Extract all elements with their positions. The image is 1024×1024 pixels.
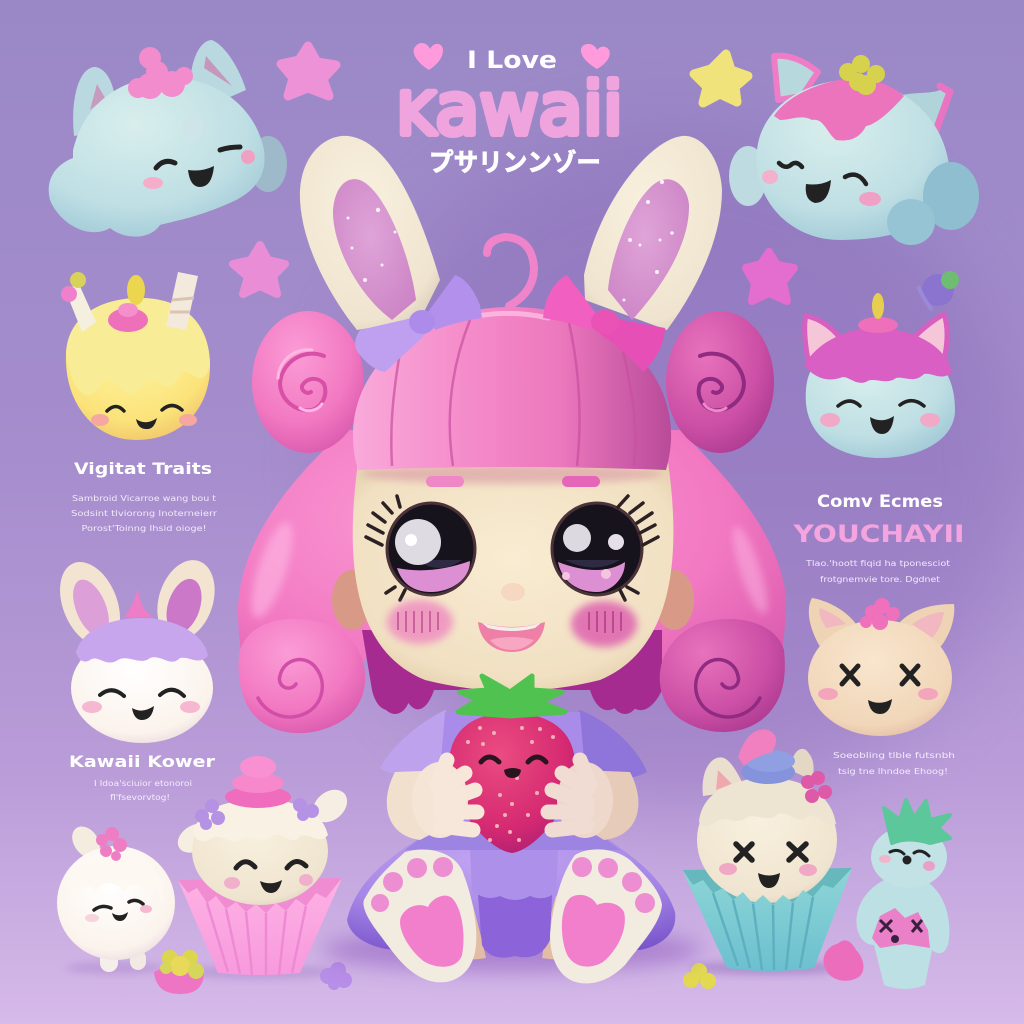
eye: left bbox=[366, 496, 475, 600]
shadow under character bbox=[322, 928, 702, 972]
mascot: peach cat bbox=[808, 598, 954, 736]
icon: yellow star top right bbox=[694, 54, 748, 103]
face bbox=[353, 462, 673, 691]
mascot: right blue cat bbox=[804, 271, 959, 458]
text block: Vigitat Traits: Sodsint tlviorong lnoterneierr bbox=[71, 509, 218, 518]
ears of head bbox=[332, 570, 372, 630]
mascot: blue cupcake bbox=[683, 730, 852, 975]
lilac bow bbox=[355, 275, 482, 372]
heading: Kawaii: Kawaii bbox=[397, 67, 623, 151]
strawberry bbox=[449, 676, 575, 853]
mascot: teal figure bbox=[856, 800, 950, 989]
subheading: katakana: プサリンンゾー bbox=[429, 143, 601, 179]
antenna hook bbox=[487, 237, 534, 306]
hair curl right bbox=[660, 619, 785, 732]
icon: candy pile left bbox=[154, 950, 204, 994]
text block: Comv Ecmes YOUCHAYII bbox=[792, 492, 964, 584]
hair curl left bbox=[238, 619, 365, 733]
text block: Comv Ecmes YOUCHAYII: Comv Ecmes bbox=[817, 492, 943, 512]
text block: Vigitat Traits: Sambroid Vicarroe wang bou t bbox=[72, 494, 216, 503]
skirt ruffle bbox=[470, 850, 558, 900]
shorts bbox=[478, 895, 552, 958]
eye: right bbox=[552, 496, 658, 600]
left foot bbox=[363, 849, 476, 982]
right hand bbox=[548, 760, 613, 838]
text block: Comv Ecmes YOUCHAYII: YOUCHAYII bbox=[792, 520, 964, 548]
mascot: top left cloud cat bbox=[49, 40, 287, 237]
hair bangs bbox=[353, 307, 671, 470]
text block: Comv Ecmes YOUCHAYII: frotgnemvie tore. Dgdnet bbox=[820, 575, 940, 584]
text block: Soeobling: tsig tne lhndoe Ehoog! bbox=[838, 767, 948, 776]
icon: purple candy bbox=[320, 962, 352, 990]
text block: Vigitat Traits: Vigitat Traits bbox=[74, 459, 212, 478]
icon: pink candy bbox=[824, 940, 863, 981]
mouth bbox=[478, 622, 545, 652]
cheek left bbox=[387, 600, 453, 644]
legs bbox=[450, 895, 580, 959]
right arm bbox=[578, 770, 638, 840]
eyebrows bbox=[426, 476, 464, 487]
waist band bbox=[405, 832, 620, 850]
title block bbox=[397, 43, 623, 179]
hair strands behind neck bbox=[362, 630, 662, 714]
mascot: pink cupcake bbox=[173, 756, 354, 979]
heading: I Love: I Love bbox=[467, 46, 557, 74]
mascot: white bunny bbox=[48, 553, 224, 743]
mascot: top right cloud cat bbox=[729, 55, 979, 245]
text block: Kawaii Kower bbox=[69, 752, 215, 802]
mascot: small white dog bbox=[57, 821, 175, 974]
text block: Kawaii Kower: I Idoa'sciuior etonoroi bbox=[94, 779, 192, 788]
right sleeve bbox=[562, 710, 647, 779]
text block: Vigitat Traits bbox=[71, 459, 218, 533]
text block: Vigitat Traits: Porost'Toinng Ihsid oioge! bbox=[82, 524, 206, 533]
text block: Kawaii Kower: fl'fsevorvtog! bbox=[110, 793, 170, 802]
icon: left heart bbox=[414, 43, 443, 70]
text block: Kawaii Kower: Kawaii Kower bbox=[69, 752, 215, 771]
text block: Soeobling: Soeobling tlble futsnbh bbox=[833, 751, 955, 760]
main character: bunny girl bbox=[238, 136, 785, 983]
text block: Soeobling bbox=[833, 751, 955, 776]
left hand bbox=[412, 760, 477, 838]
dress chest bbox=[435, 712, 590, 832]
hair bun right bbox=[666, 311, 774, 453]
hair bun left bbox=[252, 311, 364, 453]
left arm bbox=[387, 770, 450, 840]
icon: magenta star right bbox=[746, 252, 794, 301]
skirt bbox=[347, 838, 675, 950]
cheek right bbox=[571, 601, 637, 647]
icon: pink star top left bbox=[281, 46, 336, 96]
icon: right heart bbox=[581, 44, 610, 69]
right foot bbox=[550, 849, 662, 983]
left sleeve bbox=[380, 710, 462, 776]
icon: yellow candy bbox=[683, 963, 716, 989]
bunny ears bbox=[300, 136, 722, 330]
pink bow bbox=[543, 275, 665, 372]
text block: Comv Ecmes YOUCHAYII: Tlao.'hoott fiqid ha tponesciot bbox=[805, 559, 950, 568]
mascot: yellow pudding bbox=[61, 272, 210, 440]
icon: pink star left bbox=[233, 245, 285, 294]
nose bbox=[501, 583, 525, 601]
back hair bbox=[238, 430, 785, 725]
